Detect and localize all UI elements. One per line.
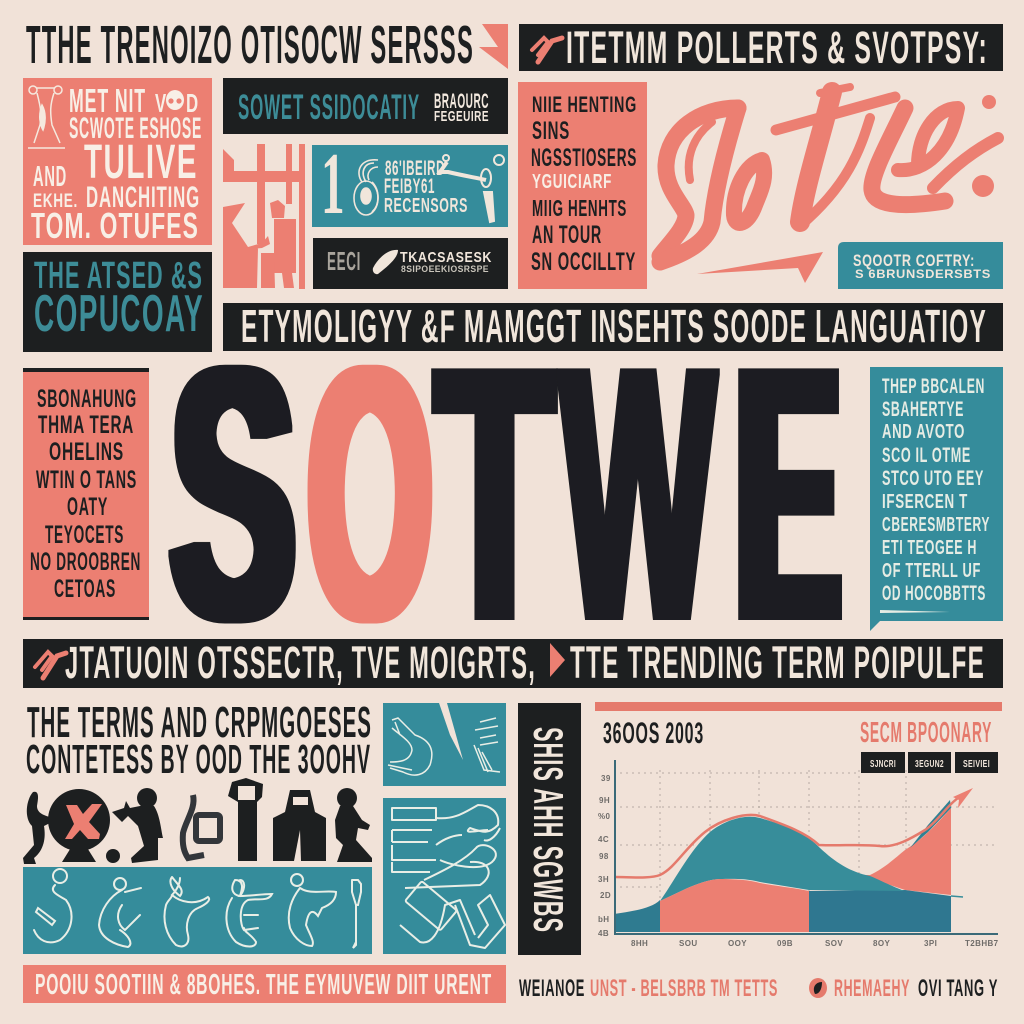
chart heading: 36OOS 2003 [603,717,704,750]
intro text: TOM. OTUFES [31,205,199,246]
panel: coral left column: TEYOCETS [45,521,124,549]
x axis labels: 8OY [873,939,890,948]
area: blue left [614,900,660,932]
y axis labels: 98 [599,852,609,861]
panel: teal speech bubble: IFSERCEN T [882,491,968,513]
heading: giant SOTWE: T [435,294,554,693]
panel: dark tracsasesk [313,238,508,289]
panel: teal fact [312,136,508,233]
panel: coral meanings: YGUICIARF [532,171,612,193]
panel: teal fact: RECENSORS [384,195,468,217]
intro text: AND [33,161,67,193]
panel: coral meanings: SN OCCILLTY [531,248,636,276]
chart legend: 3EGUN2 [915,759,944,770]
strip: coral bottom caption: POOIU SOOTIIN & 8BOHES. THE EYMUVEW DIIT URENT [35,969,492,1001]
y axis labels: 2D [600,891,611,900]
intro text: D [186,88,199,118]
intro text: V [155,88,167,118]
heading: giant SOTWE [171,294,839,693]
heading: giant SOTWE: W [561,294,717,693]
panel: dark tracsasesk: TKACSASESK [400,249,492,266]
intro text: EKHE. [33,191,78,212]
strip: coral bottom caption [23,965,506,1003]
y axis labels: 39 [601,774,611,783]
chart legend: SEIVIEI [963,759,990,770]
panel: dark copugoay [23,252,212,352]
icon: scissors tool [440,155,504,222]
x axis labels: SOV [825,939,843,948]
panel: teal fact: FEIBY61 [384,175,435,198]
panel: coral left column: SBONAHUNG [37,385,137,413]
y axis labels: 4C [598,835,609,844]
panel: teal hose illustration [383,798,506,954]
x axis labels: 8HH [631,939,648,948]
intro text: MET NIT [69,82,146,119]
bar: coral chart top [595,702,1002,711]
panel: teal small note: S 6BRUNSDERSBTS [855,267,991,281]
panel: coral left column: WTIN O TANS [36,466,137,494]
chart legend: SJNCRI [870,759,896,770]
text: CONTETESS BY OOD THE 3OOHV [26,736,371,782]
icon: figure outline [28,86,65,148]
area: coral left [660,879,809,932]
panel: coral left column: THMA TERA [38,411,134,439]
icon: skull [166,90,184,110]
intro text [31,82,202,246]
icon: coral triangle [550,643,565,677]
icon: coral X [65,804,102,839]
footer text: left: UNST - BELSBRB TM TETTS [590,975,778,1002]
line: coral trend [614,794,965,878]
panel: teal small note: SQOOTR COFTRY: [853,251,975,270]
heading: giant SOTWE: O [308,294,432,693]
panel: coral meanings: NIIE HENTING [532,92,637,117]
icon: coral ribbon [532,38,562,62]
text: E [737,294,839,693]
heading: bottom left [26,698,372,782]
panel: teal speech bubble: AND AVOTO [882,421,965,443]
y axis labels [598,774,611,938]
y axis labels: 9H [599,796,610,805]
y axis labels: 3H [598,875,609,884]
intro text: TULIVE [84,136,198,189]
area: coral right [860,808,951,895]
area chart [598,760,999,948]
teal baseline tail [951,896,963,897]
icon: footer coral bean [809,978,827,998]
panel: coral meanings: AN TOUR [532,221,602,249]
panel: teal fact: 1 [321,136,347,233]
grid lines [614,770,998,932]
icon: script logo [660,87,998,283]
banner: middle: JTATUOIN OTSSECTR, TVE MOIGRTS, [65,637,536,688]
y axis labels: %0 [598,812,611,821]
panel: teal small note [838,242,1003,289]
panel: dark society header: FEGEUIRE [434,108,489,125]
x axis labels: 09B [777,939,793,948]
icon: coral corner arrow [479,24,508,69]
y axis labels: bH [598,915,609,924]
panel: dark society header [223,78,508,134]
arrow head [953,788,973,808]
panel: coral intro [23,78,212,246]
panel: teal fact: 86'IBEIRD [385,157,445,180]
panel: coral left column: OATY [67,493,108,521]
x axis labels: 3PI [924,939,937,948]
area: teal sliver [910,800,951,848]
x axis labels: OOY [728,939,747,948]
panel: coral meanings: MIIG HENHTS [532,195,627,221]
icon: spiral ornament [354,160,378,215]
icons: black silhouettes [23,778,372,864]
heading: giant SOTWE: S [171,294,295,693]
panel: coral left column: OHELINS [49,438,124,466]
area: blue right [809,890,951,932]
chart legend [861,752,998,773]
x axis labels: SOU [679,939,698,948]
panel: teal foot illustration [383,703,506,786]
area: teal main [660,817,905,901]
panel: coral meanings: SINS [532,117,570,145]
x axis labels: T2BHB7 [965,939,999,948]
panel: teal line figures [23,867,372,954]
panel: dark copugoay: THE ATSED &S [34,255,203,297]
x axis labels [631,939,999,948]
panel: dark tracsasesk: EECI [327,246,361,276]
panel: dark vertical label [518,703,581,955]
panel: dark copugoay: COPUCOAY [34,285,204,343]
icon: shoe [373,250,398,274]
illustration: coral figures [223,144,305,289]
panel: coral meanings: NGSSTIOSERS [531,144,637,172]
text: THE TERMS AND CRPMGOESES [27,698,372,747]
panel: dark society header: BRAOURC [434,90,489,113]
panel: teal speech bubble [870,367,1003,631]
panel: coral meanings [518,82,647,289]
icon: coral ribbon [35,652,66,678]
y axis labels: 4B [598,929,609,938]
panel: coral left column: CETOAS [54,575,116,603]
panel: coral left column [23,368,149,620]
footer text: right: RHEMAEHY [834,975,910,1002]
panel: coral left column: NO DROOBREN [30,548,141,576]
footer text: left: WEIANOE [519,975,585,1002]
panel: dark tracsasesk: 8SIPOEEKIOSRSPE [401,264,489,274]
footer text: left [519,975,778,1002]
panel: dark society header: SOWET SSIDOCATIY [238,88,420,127]
intro text: DANCHITING [86,181,200,214]
panel: teal speech bubble: SBAHERTYE [882,398,964,421]
axes [615,760,998,934]
panel: coral intro: SCWOTE ESHOSE [69,112,202,145]
text: TTHE TRENOIZO OTISOCW SERSSS [26,15,474,75]
